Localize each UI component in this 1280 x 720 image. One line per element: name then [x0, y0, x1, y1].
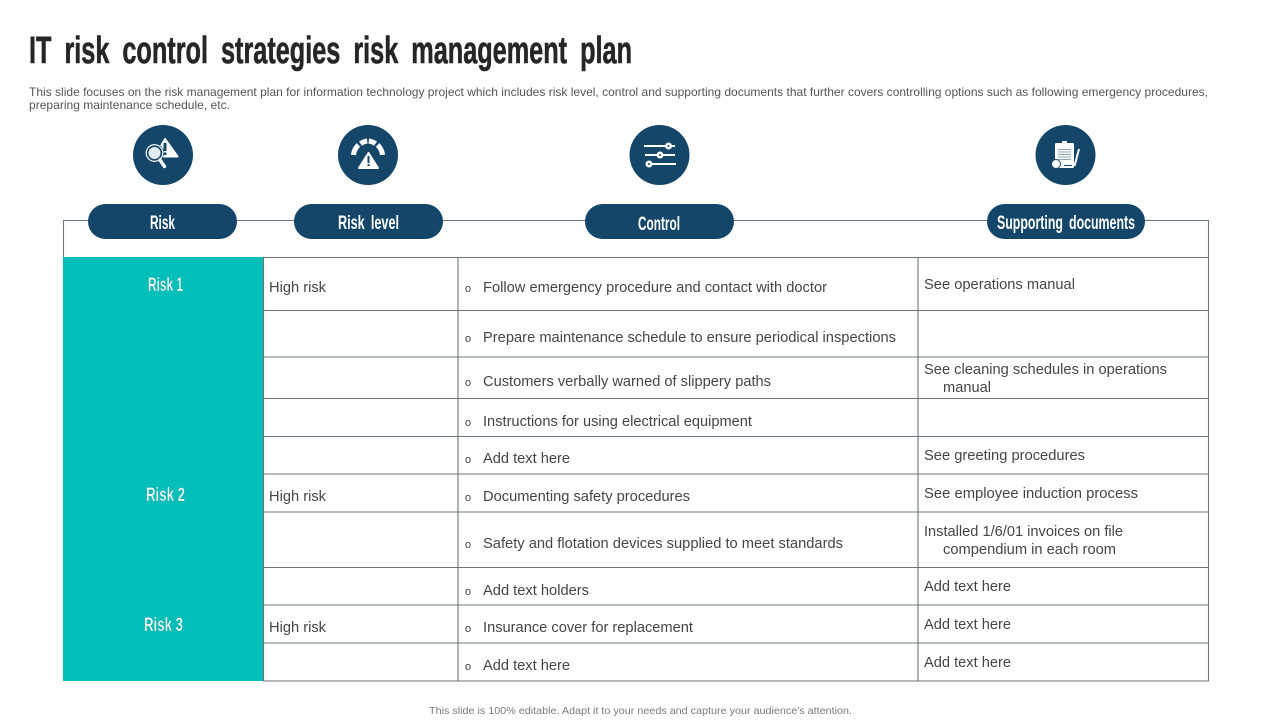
supporting documents cells: Installed 1/6/01 invoices on file: [924, 524, 1123, 540]
control cells: o: [465, 377, 471, 389]
header: Risk: Risk: [150, 213, 175, 234]
control cells: Add text holders: [483, 583, 589, 599]
title: IT risk control strategies risk management plan: [29, 30, 632, 72]
footer note: This slide is 100% editable. Adapt it to your needs and capture your audience's attention.: [429, 705, 852, 717]
supporting documents cells: See operations manual: [924, 277, 1075, 293]
control cells: Safety and flotation devices supplied to meet standards: [483, 536, 843, 552]
risk level cells: High risk: [269, 489, 327, 505]
supporting documents cells: Add text here: [924, 617, 1011, 633]
control cells: Customers verbally warned of slippery paths: [483, 374, 771, 390]
control cells: o: [465, 539, 471, 551]
control cells: Insurance cover for replacement: [483, 620, 693, 636]
description text: [29, 85, 1208, 112]
control cells: o: [465, 623, 471, 635]
risk labels: Risk 2: [146, 485, 185, 506]
risk level cells: High risk: [269, 280, 327, 296]
control cells: o: [465, 417, 471, 429]
supporting documents cells: See cleaning schedules in operations: [924, 362, 1167, 378]
table: [63, 220, 1208, 681]
risk labels: Risk 1: [148, 275, 183, 296]
control cells: o: [465, 661, 471, 673]
icon: clipboard document: [1036, 125, 1096, 185]
header: Control: Control: [638, 214, 680, 235]
control cells: o: [465, 333, 471, 345]
risk labels: Risk 3: [144, 615, 183, 636]
header: Supporting documents: [987, 204, 1145, 239]
icon: magnifier with warning: [133, 125, 193, 185]
control cells: Follow emergency procedure and contact with doctor: [483, 280, 827, 296]
supporting documents cells: manual: [943, 380, 991, 396]
icon: sliders: [630, 125, 690, 185]
control cells: o: [465, 283, 471, 295]
control cells: [465, 280, 896, 674]
risk column teal block: [63, 257, 264, 681]
supporting documents cells: [924, 277, 1167, 671]
control cells: Documenting safety procedures: [483, 489, 690, 505]
supporting documents cells: See employee induction process: [924, 486, 1138, 502]
control cells: Add text here: [483, 451, 570, 467]
icon: gauge with warning: [338, 125, 398, 185]
risk labels: [144, 275, 185, 636]
supporting documents cells: Add text here: [924, 579, 1011, 595]
header: Risk level: Risk level: [338, 213, 399, 234]
description text: preparing maintenance schedule, etc.: [29, 98, 230, 112]
header: Risk level: [294, 204, 443, 239]
control cells: o: [465, 586, 471, 598]
control cells: Instructions for using electrical equipment: [483, 414, 752, 430]
description text: This slide focuses on the risk management plan for information technology project which includes risk level, control and supporting documents that further covers controlling options such as following emergency procedures,: [29, 85, 1208, 99]
supporting documents cells: compendium in each room: [943, 542, 1116, 558]
header: Supporting documents: Supporting documents: [997, 213, 1135, 234]
control cells: Prepare maintenance schedule to ensure periodical inspections: [483, 330, 896, 346]
supporting documents cells: See greeting procedures: [924, 448, 1085, 464]
risk level cells: [269, 280, 327, 636]
control cells: Add text here: [483, 658, 570, 674]
control cells: o: [465, 492, 471, 504]
header: Control: [585, 204, 734, 239]
control cells: o: [465, 454, 471, 466]
supporting documents cells: Add text here: [924, 655, 1011, 671]
risk level cells: High risk: [269, 620, 327, 636]
header: Risk: [88, 204, 237, 239]
